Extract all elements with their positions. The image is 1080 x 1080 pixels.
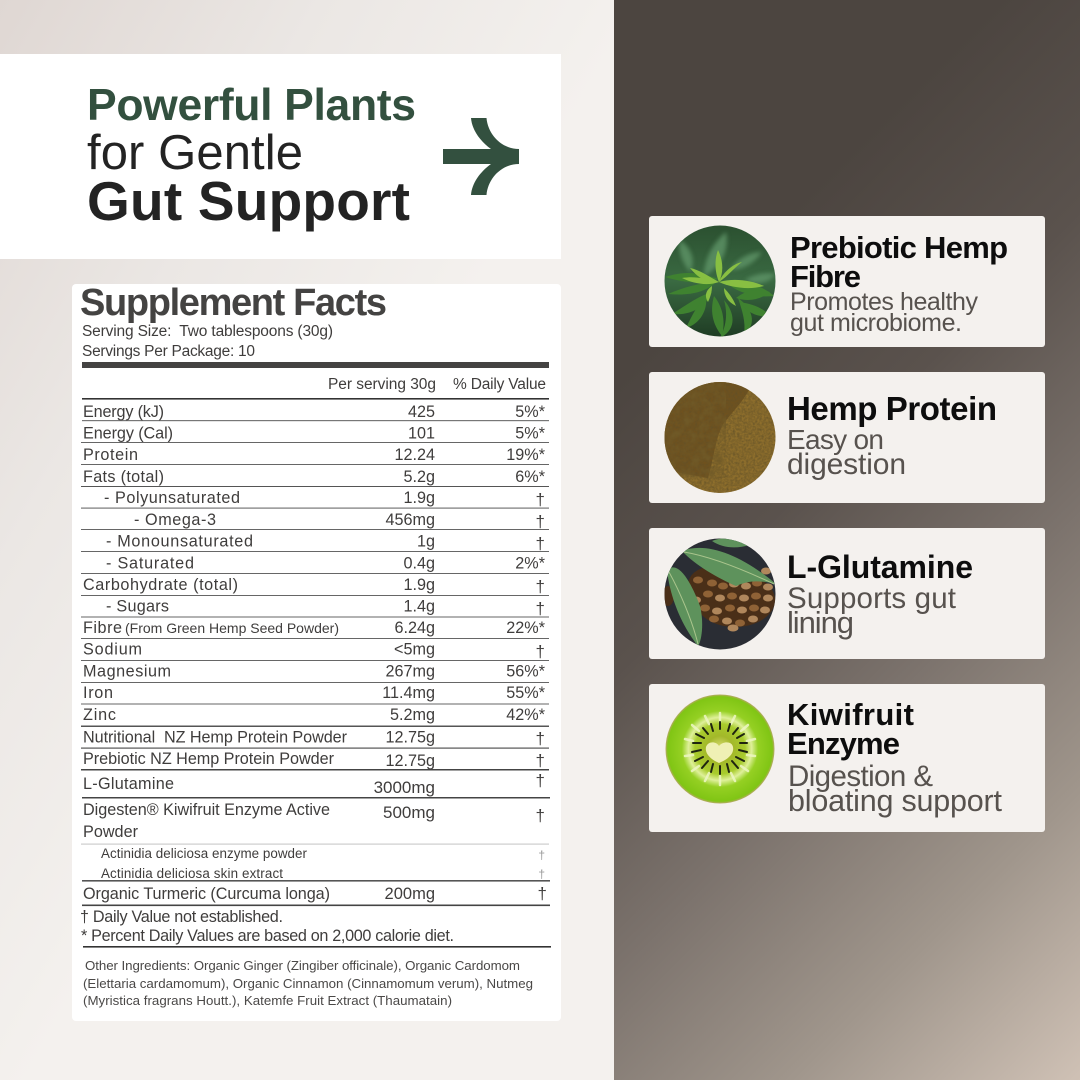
text: kiwifruit enzyme: Enzyme [787, 726, 900, 761]
row: nutritional hemp protein: 12.75g [385, 728, 435, 746]
row: monounsaturated [106, 532, 545, 553]
row: fibre: Fibre [83, 619, 122, 637]
text: kiwifruit enzyme: Kiwifruit [787, 697, 914, 732]
row: energy kJ: 425 [408, 403, 435, 421]
other ingredients [83, 958, 533, 1008]
row: fats [83, 468, 546, 486]
row: fibre: 22%* [506, 619, 546, 637]
row: turmeric: 200mg [385, 885, 435, 903]
row: polyunsaturated [104, 489, 545, 509]
row: monounsaturated: - Monounsaturated [106, 532, 253, 550]
row: enzyme powder [101, 846, 545, 862]
other ingredients: (Myristica fragrans Houtt.), Katemfe Fruit Extract (Thaumatain) [83, 993, 452, 1008]
row: omega-3: † [536, 512, 545, 531]
title panel: for Gentle [87, 126, 303, 180]
text: hemp protein: digestion [787, 448, 906, 481]
row: carbohydrate: Carbohydrate (total) [83, 576, 238, 594]
row: nutritional hemp protein: Nutritional NZ Hemp Protein Powder [83, 728, 348, 746]
text: prebiotic hemp fibre: Prebiotic Hemp [790, 230, 1008, 265]
row: saturated [106, 554, 546, 572]
row: l-glutamine: L-Glutamine [83, 775, 174, 793]
panel: l-glutamine [649, 528, 1045, 659]
text: l-glutamine: Supports gut [787, 582, 956, 615]
footnotes [80, 908, 454, 945]
panel: prebiotic hemp fibre [649, 216, 1045, 347]
serving information: Serving Size: Two tablespoons (30g) [82, 323, 333, 340]
footnotes: † Daily Value not established. [80, 908, 283, 926]
row: fats: Fats (total) [83, 468, 164, 486]
row: saturated: 0.4g [403, 554, 435, 572]
row: l-glutamine: 3000mg [374, 778, 435, 797]
row: fats: 6%* [515, 468, 546, 486]
row: zinc: Zinc [83, 706, 116, 724]
row: digesten: Digesten® Kiwifruit Enzyme Active [83, 801, 330, 819]
panel: supplement facts [72, 282, 561, 1021]
row: polyunsaturated: 1.9g [403, 489, 435, 507]
text: prebiotic hemp fibre: gut microbiome. [790, 309, 962, 337]
text: kiwifruit enzyme: bloating support [788, 784, 1003, 818]
text: l-glutamine: lining [787, 605, 854, 640]
table header [328, 376, 546, 393]
row: prebiotic hemp protein: Prebiotic NZ Hemp Protein Powder [83, 750, 335, 768]
row: fibre: (From Green Hemp Seed Powder) [125, 620, 339, 636]
text: l-glutamine [787, 549, 973, 640]
row: energy cal [83, 424, 546, 442]
row: prebiotic hemp protein [83, 750, 545, 770]
row: protein: 19%* [506, 446, 546, 464]
row: digesten: † [536, 806, 545, 825]
text: hemp protein: Hemp Protein [787, 390, 997, 427]
row: iron: 11.4mg [382, 684, 435, 702]
row: omega-3 [134, 511, 545, 531]
icon: arrow [443, 118, 519, 195]
row: enzyme powder: Actinidia deliciosa enzyme powder [101, 846, 308, 861]
icon: hemp powder photo [664, 382, 776, 494]
row: energy kJ: Energy (kJ) [83, 403, 164, 421]
row: sugars: † [536, 599, 545, 618]
row: l-glutamine: † [536, 771, 545, 790]
row: zinc: 5.2mg [390, 706, 435, 724]
text: prebiotic hemp fibre: Fibre [790, 259, 861, 294]
row: energy cal: Energy (Cal) [83, 424, 173, 442]
row: prebiotic hemp protein: † [536, 751, 545, 770]
other ingredients: Other Ingredients: Organic Ginger (Zingiber officinale), Organic Cardomom [85, 958, 520, 973]
serving information [82, 323, 333, 360]
row: sodium: † [536, 642, 545, 661]
row: iron [83, 684, 546, 702]
row: skin extract [101, 866, 545, 881]
text: kiwifruit enzyme: Digestion & [788, 760, 933, 793]
row: turmeric: Organic Turmeric (Curcuma longa) [83, 885, 330, 903]
row: magnesium: 267mg [386, 662, 435, 680]
row: turmeric [83, 884, 547, 903]
row: skin extract: † [538, 867, 545, 881]
panel: kiwifruit enzyme [649, 684, 1045, 832]
text: l-glutamine: L-Glutamine [787, 549, 973, 585]
row: digesten: Powder [83, 823, 139, 841]
text: hemp protein: Easy on [787, 424, 884, 455]
title panel: Powerful Plants [87, 81, 416, 130]
row: nutritional hemp protein [83, 728, 545, 748]
row: magnesium [83, 662, 546, 680]
row: iron: 55%* [506, 684, 546, 702]
icon: hemp seeds photo [662, 538, 776, 650]
table header: Per serving 30g [328, 376, 436, 393]
left background panel [0, 0, 614, 1080]
row: carbohydrate [83, 576, 545, 596]
row: iron: Iron [83, 684, 113, 702]
row: digesten: 500mg [383, 803, 435, 822]
row: protein [83, 446, 546, 464]
icon: hemp plant photo [664, 225, 776, 338]
text: hemp protein [787, 390, 997, 481]
row: turmeric: † [538, 884, 547, 903]
row: sodium: <5mg [394, 640, 435, 658]
row: fibre [83, 619, 546, 637]
row: sugars: 1.4g [403, 598, 435, 616]
text: prebiotic hemp fibre [790, 230, 1008, 337]
footnotes: * Percent Daily Values are based on 2,000 calorie diet. [81, 927, 454, 945]
row: prebiotic hemp protein: 12.75g [385, 752, 435, 770]
row: energy kJ [83, 403, 546, 421]
row: l-glutamine [83, 771, 545, 797]
row: fats: 5.2g [403, 468, 435, 486]
row: carbohydrate: 1.9g [403, 576, 435, 594]
row: protein: Protein [83, 446, 138, 464]
row: monounsaturated: † [536, 534, 545, 553]
row: zinc: 42%* [506, 706, 546, 724]
row: protein: 12.24 [394, 446, 435, 464]
row: sugars: - Sugars [106, 598, 169, 616]
panel: hemp protein [649, 372, 1045, 503]
row: carbohydrate: † [536, 577, 545, 596]
row: magnesium: 56%* [506, 662, 546, 680]
row: polyunsaturated: - Polyunsaturated [104, 489, 240, 507]
row: fibre: 6.24g [394, 619, 435, 637]
row: saturated: - Saturated [106, 554, 194, 572]
row: monounsaturated: 1g [417, 532, 435, 550]
row: energy cal: 101 [408, 424, 435, 442]
title panel: Gut Support [87, 170, 410, 232]
row: saturated: 2%* [515, 554, 546, 572]
row: energy cal: 5%* [515, 424, 546, 442]
row: zinc [83, 706, 546, 724]
row: omega-3: 456mg [386, 511, 435, 529]
row: magnesium: Magnesium [83, 662, 171, 680]
row: energy kJ: 5%* [515, 403, 546, 421]
text: prebiotic hemp fibre: Promotes healthy [790, 288, 978, 316]
row: skin extract: Actinidia deliciosa skin extract [101, 866, 283, 881]
row: sugars [106, 598, 545, 618]
right background panel [614, 0, 1080, 1080]
table header: % Daily Value [453, 376, 546, 393]
row: nutritional hemp protein: † [536, 729, 545, 748]
row: enzyme powder: † [538, 848, 545, 862]
title panel [0, 54, 561, 259]
row: sodium [83, 640, 545, 661]
text: kiwifruit enzyme [787, 697, 1003, 818]
supplement facts heading: Supplement Facts [80, 282, 387, 324]
row: polyunsaturated: † [536, 490, 545, 509]
serving information: Servings Per Package: 10 [82, 343, 255, 360]
row: omega-3: - Omega-3 [134, 511, 216, 529]
icon: kiwi slice [666, 694, 774, 804]
row: sodium: Sodium [83, 640, 142, 658]
other ingredients: (Elettaria cardamomum), Organic Cinnamon (Cinnamomum verum), Nutmeg [83, 976, 533, 991]
row: digesten [83, 801, 545, 841]
